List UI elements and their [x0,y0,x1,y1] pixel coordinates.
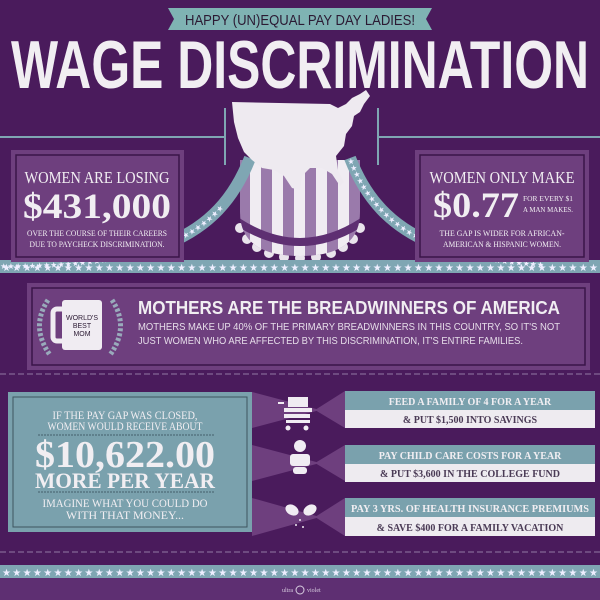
icon: world's best mom mug [39,300,121,355]
panel: mothers are the breadwinners: MOTHERS MAKE UP 40% OF THE PRIMARY BREADWINNERS IN THIS COUNTRY, SO IT'S NOT [138,322,560,333]
panel: pay gap closed: IMAGINE WHAT YOU COULD DO [42,496,208,510]
icon: baby [290,440,310,474]
panel: women only make: A MAN MAKES. [523,205,573,214]
panel: pay gap closed: $10,622.00 [35,434,215,476]
panel: women are losing: DUE TO PAYCHECK DISCRIMINATION. [30,240,164,249]
bar: child care: & PUT $3,600 IN THE COLLEGE FUND [380,469,560,480]
panel: women only make: AMERICAN & HISPANIC WOMEN. [443,240,561,249]
icon: world's best mom mug: WORLD'S [66,315,98,322]
panel: mothers are the breadwinners [27,283,590,370]
panel: women only make: WOMEN ONLY MAKE [430,168,574,187]
panel: mothers are the breadwinners: JUST WOMEN WHO ARE AFFECTED BY THIS DISCRIMINATION, IT'S ENTIRE FAMILIES. [138,336,523,347]
icon: shopping cart [278,397,312,430]
star ribbons [0,156,600,274]
shield with stripes [235,155,366,265]
arrows [252,391,345,536]
star ribbons: ★★★★★★★★★★★★★★★★★★★★★★★★★★★★★★★★★★★★★★★★★★★★★★★★★★★★★★★★★★ [2,263,598,274]
panel: women are losing [11,150,184,262]
star ribbons: ★★★★★★★★★★★★★★★★★★★★★★★★★★★★★★★★★ [348,158,544,268]
icon: US map [232,90,370,190]
panel: pay gap closed [8,392,252,532]
bar: health insurance: PAY 3 YRS. OF HEALTH INSURANCE PREMIUMS [351,504,589,515]
panel: women are losing: $431,000 [23,186,171,226]
banner ribbon: HAPPY (UN)EQUAL PAY DAY LADIES! [185,12,415,29]
bar: feed a family: & PUT $1,500 INTO SAVINGS [403,415,538,426]
bar: feed a family: FEED A FAMILY OF 4 FOR A YEAR [389,397,552,408]
banner ribbon [168,8,432,30]
bar: feed a family [345,391,595,428]
bar: child care [345,445,595,482]
bar: health insurance: & SAVE $400 FOR A FAMILY VACATION [377,523,564,534]
panel: women are losing: WOMEN ARE LOSING [24,168,170,187]
bar: health insurance [345,498,595,536]
panel: pay gap closed: WOMEN WOULD RECEIVE ABOUT [48,419,203,433]
panel: women only make: $0.77 [433,185,519,225]
footer logo: ultra [282,588,293,594]
footer logo [282,586,321,594]
panel: women only make: THE GAP IS WIDER FOR AFRICAN- [440,229,565,238]
panel: mothers are the breadwinners: MOTHERS ARE THE BREADWINNERS OF AMERICA [138,298,560,318]
bar: child care: PAY CHILD CARE COSTS FOR A YEAR [379,451,562,462]
panel: pay gap closed: WITH THAT MONEY... [66,508,184,522]
panel: women only make: FOR EVERY $1 [523,194,573,203]
bottom star band: ★★★★★★★★★★★★★★★★★★★★★★★★★★★★★★★★★★★★★★★★★★★★★★★★★★★★★★★★★★ [2,568,598,579]
footer logo: violet [307,588,321,594]
panel: pay gap closed: MORE PER YEAR [35,468,216,493]
panel: women only make [415,150,589,262]
icon: world's best mom mug: BEST [73,323,92,330]
connector lines [0,108,600,165]
panel: women are losing: OVER THE COURSE OF THEIR CAREERS [27,229,167,238]
star ribbons: ★★★★★★★★★★★★★★★★★★★★★★★★★★★★★★★★★ [0,206,223,269]
icon: world's best mom mug: MOM [73,331,91,338]
icon: pills [283,502,319,528]
panel: pay gap closed: IF THE PAY GAP WAS CLOSED, [52,408,198,422]
